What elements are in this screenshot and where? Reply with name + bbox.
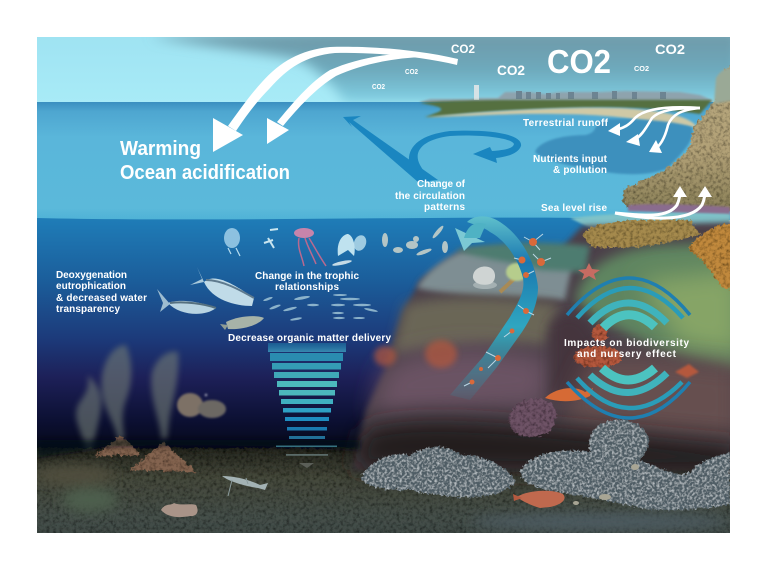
heading: warming and ocean acidification: Ocean acidification bbox=[120, 162, 290, 184]
icon: anglerfish bbox=[177, 393, 226, 418]
polluted water plume bbox=[535, 119, 693, 174]
coastal city skyline bbox=[420, 85, 713, 102]
white arrow: acidification bbox=[267, 53, 425, 144]
CO2 labels: CO2 bbox=[497, 62, 525, 78]
label: biodiversity and nursery effect: and nursery effect bbox=[577, 349, 677, 360]
orange sponge shelf bbox=[583, 220, 735, 290]
label: change of the circulation patterns bbox=[395, 179, 466, 213]
green sea plant bbox=[500, 263, 528, 292]
icon: translucent salps bbox=[338, 233, 368, 256]
terrestrial runoff arrows bbox=[608, 107, 700, 153]
label: biodiversity and nursery effect bbox=[564, 338, 689, 360]
hydrothermal smoke plumes bbox=[76, 345, 178, 448]
infographic scene bbox=[37, 37, 730, 533]
label: deoxygenation: transparency bbox=[56, 304, 120, 315]
small fish school bbox=[263, 294, 378, 321]
bottom branching corals bbox=[360, 420, 730, 510]
label: change of the circulation patterns: patterns bbox=[424, 202, 465, 213]
green coastline and beach bbox=[420, 100, 712, 127]
seabed bbox=[37, 446, 730, 533]
purple sponge bbox=[509, 399, 556, 437]
sea level rise arrows bbox=[615, 186, 712, 218]
dark vignette on seabed horizon bbox=[37, 440, 360, 458]
label: change of the circulation patterns: the circulation bbox=[395, 191, 465, 202]
label: sea level rise: Sea level rise bbox=[541, 203, 607, 214]
shallow reef water strip bbox=[570, 213, 730, 228]
underwater reef slope bbox=[350, 222, 740, 475]
red sea fans bbox=[374, 324, 699, 378]
icon: mackerel bbox=[157, 289, 216, 314]
CO2 labels: CO2 bbox=[634, 64, 649, 73]
CO2 labels: CO2 bbox=[655, 41, 685, 57]
CO2 labels bbox=[372, 41, 685, 91]
seabed grass patches bbox=[35, 465, 730, 530]
coastal rock cliff bbox=[622, 65, 730, 216]
oxygen molecule clusters bbox=[464, 234, 551, 386]
label: deoxygenation bbox=[56, 270, 147, 315]
pebbles bbox=[573, 464, 639, 505]
icon: orange reef fish bbox=[545, 388, 593, 401]
label: terrestrial runoff: Terrestrial runoff bbox=[523, 118, 609, 129]
background scene panel bbox=[37, 37, 730, 533]
icon: bottom fish bbox=[220, 316, 264, 330]
CO2 labels: CO2 bbox=[451, 42, 475, 56]
icon: tuna fish bbox=[190, 267, 254, 306]
label: organic matter delivery: Decrease organic matter delivery bbox=[228, 333, 391, 344]
label: deoxygenation: Deoxygenation bbox=[56, 270, 127, 281]
icon: clear jellyfish bbox=[224, 228, 240, 256]
sky with clouds bbox=[37, 37, 730, 102]
label: nutrients input and pollution: Nutrients input bbox=[533, 154, 608, 165]
blue circulation arrow bbox=[343, 116, 521, 182]
ocean surface bbox=[37, 102, 730, 220]
label: change of the circulation patterns: Change of bbox=[417, 179, 466, 190]
white shell on sand bbox=[473, 266, 497, 289]
icon: red fish on seabed bbox=[513, 491, 565, 508]
icon: small fish beneath salps bbox=[332, 260, 352, 266]
organic matter funnel bbox=[268, 343, 346, 468]
label: trophic relationships bbox=[255, 271, 359, 293]
CO2 labels: CO2 bbox=[547, 43, 611, 80]
heading: warming and ocean acidification bbox=[120, 138, 290, 184]
icon: pink jellyfish bbox=[294, 228, 326, 266]
starfish bbox=[578, 263, 600, 280]
label: deoxygenation: & decreased water bbox=[56, 293, 147, 304]
label: nutrients input and pollution bbox=[533, 154, 608, 176]
icon: krill bbox=[264, 229, 278, 248]
CO2 labels: CO2 bbox=[405, 67, 418, 76]
label: trophic relationships: relationships bbox=[275, 282, 339, 293]
heading: warming and ocean acidification: Warming bbox=[120, 138, 201, 160]
label: deoxygenation: eutrophication bbox=[56, 281, 126, 292]
circulation ribbon arrow bbox=[450, 216, 538, 400]
biodiversity rings bbox=[567, 278, 690, 418]
icon: sea cucumber bbox=[161, 503, 198, 517]
label: nutrients input and pollution: & pollution bbox=[553, 165, 607, 176]
label: trophic relationships: Change in the trophic bbox=[255, 271, 359, 282]
label: biodiversity and nursery effect: Impacts on biodiversity bbox=[564, 338, 689, 349]
CO2 labels: CO2 bbox=[372, 82, 385, 91]
icon: deep-sea shark bbox=[222, 476, 268, 496]
jellyfish and plankton group bbox=[224, 225, 448, 267]
deep water column bbox=[37, 218, 600, 460]
icon: plankton cluster bbox=[382, 225, 448, 257]
hydrothermal vent mounds bbox=[95, 435, 197, 472]
white arrow: warming bbox=[213, 47, 458, 152]
